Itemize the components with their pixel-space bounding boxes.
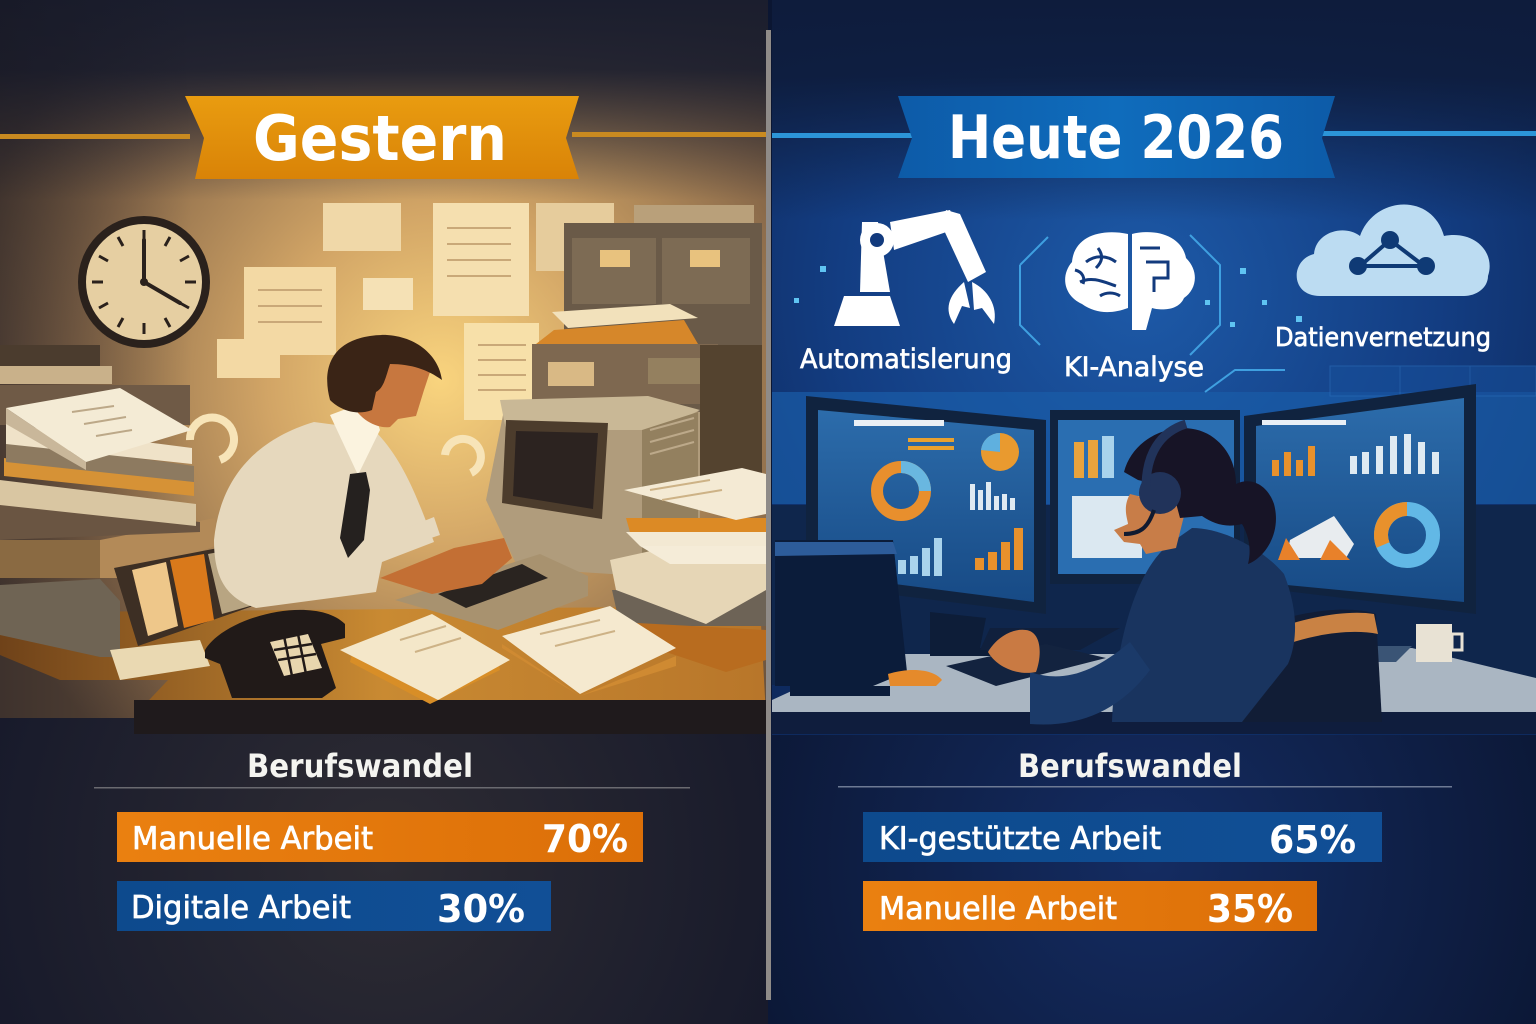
keyboard [395,554,588,630]
wall top fade [772,0,1536,220]
heading: Berufswandel left: Berufswandel [247,747,473,785]
sparkle dots [794,266,1302,327]
bar: KI-gestützte Arbeit 65%: 65% [1269,818,1356,862]
telephone [205,610,345,698]
title: Heute 2026: Heute 2026 [948,103,1284,173]
lower room shade [772,505,1536,685]
notes pinned on wall [217,203,754,420]
wall top fade [0,0,768,200]
keyboards and mug [888,624,1462,686]
bar: KI-gestützte Arbeit 65%: KI-gestützte Arbeit [879,821,1161,857]
bar: Manuelle Arbeit 70%: Manuelle Arbeit [132,821,373,857]
filing cabinet [532,223,762,495]
spiral decoration [190,418,481,473]
bar: Digitale Arbeit 30% [117,881,551,931]
bar: Manuelle Arbeit 35% [863,881,1317,931]
background: right panel [768,0,1536,1024]
bar: Digitale Arbeit 30%: 30% [437,887,525,931]
desk papers [340,606,676,704]
section: right stats [838,747,1452,931]
label: KI-Analyse: KI-Analyse [1064,352,1204,383]
ribbon: Gestern [0,96,766,179]
label: Datienvernetzung: Datienvernetzung [1275,323,1491,353]
desk front shadow [134,700,766,734]
desk [0,606,766,716]
ribbon: Heute 2026 [772,96,1536,178]
desk surface [772,648,1536,734]
box and folders [0,544,253,680]
panel: Gestern office scene [0,0,768,734]
icon: robot arm [834,210,995,326]
monitor: center dashboard [1050,410,1240,584]
title: Gestern: Gestern [253,102,507,175]
background: left panel [0,0,768,1024]
wall grid panel [1330,366,1536,396]
desk front [772,712,1536,734]
analyst with headset [988,424,1382,725]
label: Automatislerung: Automatislerung [800,344,1012,375]
office worker [214,335,512,608]
icon: data cloud [1297,204,1490,296]
office wall [0,0,768,718]
heading: Berufswandel right: Berufswandel [1018,747,1242,785]
icon: network frame [1020,235,1285,392]
computer [486,396,700,576]
bar: Digitale Arbeit 30%: Digitale Arbeit [131,890,351,926]
section: left stats [94,747,690,931]
wall side shade [0,0,768,718]
divider between panels [766,30,771,1000]
office background [772,0,1536,735]
bar: KI-gestützte Arbeit 65% [863,812,1382,862]
glowing horizon [772,392,1536,504]
paper stack right [610,468,766,672]
wall clock [78,216,210,348]
panel: Heute 2026 control room [772,0,1536,735]
bar: Manuelle Arbeit 35%: 35% [1207,887,1293,931]
monitor: right dashboard [1244,384,1476,614]
paper stack left [0,345,215,578]
bar: Manuelle Arbeit 35%: Manuelle Arbeit [879,891,1117,927]
monitor: left dashboard [806,396,1046,656]
bar: Manuelle Arbeit 70%: 70% [542,817,628,861]
foreground small monitor [775,540,907,696]
icon: brain [1065,232,1195,330]
bar: Manuelle Arbeit 70% [117,812,643,862]
